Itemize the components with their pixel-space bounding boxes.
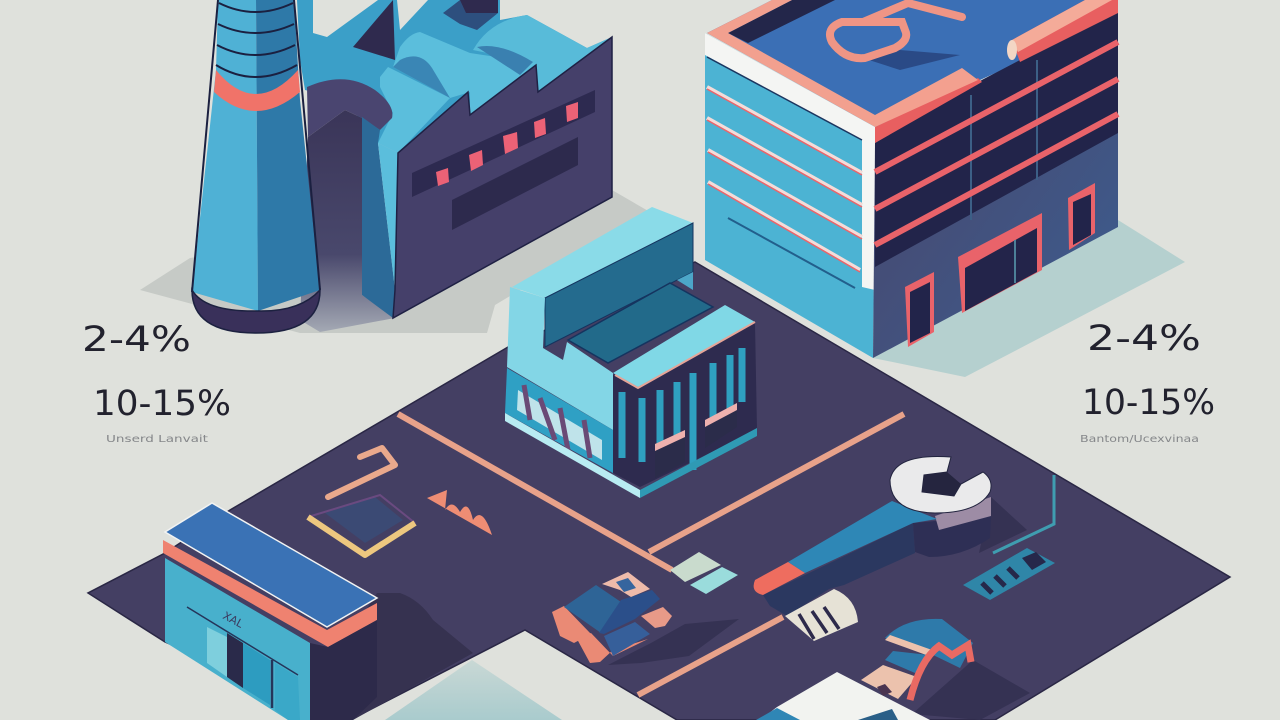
left face: [705, 33, 875, 358]
car left: [552, 572, 739, 665]
factory shadow: [140, 190, 650, 333]
right stats: Bantom/Ucexvinaa: [1080, 434, 1199, 445]
roof pink edge: [707, 0, 875, 127]
arch interior: [300, 110, 395, 332]
blue column: [362, 117, 395, 318]
ground plane: [88, 262, 1230, 720]
left stats: 2-4%: [82, 320, 191, 360]
roof: [707, 0, 1118, 127]
large office building: [705, 0, 1118, 358]
chimney red band: [214, 70, 300, 111]
wrench head cylinder: [913, 516, 991, 557]
car right: [861, 619, 1030, 720]
roof panel: [568, 283, 713, 363]
right stats: [1080, 319, 1215, 445]
car shadow: [608, 619, 739, 665]
roof panel B: [393, 32, 537, 115]
door panels: [655, 403, 737, 478]
dark floor bands: [875, 11, 1118, 267]
right face: [873, 11, 1118, 358]
front top plate: [613, 305, 755, 387]
back dark face: [545, 223, 693, 347]
shop side: [310, 620, 377, 720]
wrench red tip: [754, 562, 805, 595]
hatched tag icon: [963, 548, 1055, 600]
shop sign: XAL: [221, 609, 246, 631]
shop shadow: [340, 593, 473, 720]
wrench head: [890, 456, 991, 513]
shop wall: [165, 558, 310, 720]
back top plate: [512, 207, 693, 298]
left stats: [82, 320, 231, 445]
left door: [905, 272, 934, 347]
wrench handle side: [763, 523, 915, 616]
wrench shadow: [979, 497, 1027, 553]
chimney: [192, 0, 320, 333]
factory dark block right: [443, 0, 498, 30]
roof panel A: [378, 67, 450, 153]
factory: [297, 0, 612, 332]
building shadow: [873, 220, 1185, 377]
left wall upper: [507, 287, 613, 430]
white band: [705, 33, 875, 290]
factory dark triangle left: [353, 0, 395, 60]
roof number icon: [830, 3, 962, 70]
factory side wall: [393, 37, 612, 318]
window stripes right: [622, 348, 742, 470]
left stats: Unserd Lanvait: [106, 434, 208, 445]
roof parapet right: [1007, 0, 1118, 62]
shop awning line: [187, 607, 298, 675]
small floor icons: [308, 448, 492, 555]
striped pad: [670, 552, 738, 594]
car shadow: [912, 660, 1030, 720]
shop building: [163, 503, 377, 720]
chimney rings: [216, 3, 297, 77]
white van at bottom: [756, 672, 930, 720]
arch band: [307, 79, 392, 137]
shop roof: [165, 503, 377, 627]
red floor bars: [875, 42, 1118, 245]
right stats: 2-4%: [1087, 319, 1201, 359]
right wall: [613, 323, 757, 487]
wrench icon: [754, 456, 1054, 616]
base: [505, 413, 640, 498]
window stripes: [707, 87, 862, 270]
factory red windows: [436, 102, 578, 186]
shop doors: [207, 627, 300, 720]
roof shadows: [393, 56, 450, 98]
right door: [1068, 183, 1095, 250]
dark window strip: [412, 90, 595, 197]
main entrance: [958, 213, 1042, 313]
road lines: [398, 414, 904, 695]
factory vent panel: [452, 137, 578, 230]
brush: [785, 589, 858, 641]
light blue blade: [378, 143, 398, 290]
central small building: [505, 207, 757, 498]
wrench handle top: [788, 501, 937, 573]
factory roof back: [297, 0, 612, 153]
shop pink fascia: [163, 540, 377, 647]
right stats: 10-15%: [1082, 383, 1215, 423]
left stats: 10-15%: [93, 384, 231, 424]
roof panel C: [473, 15, 612, 92]
roof dark inner edge: [728, 0, 835, 43]
roof parapet front: [875, 68, 982, 143]
left windows: [505, 368, 613, 473]
